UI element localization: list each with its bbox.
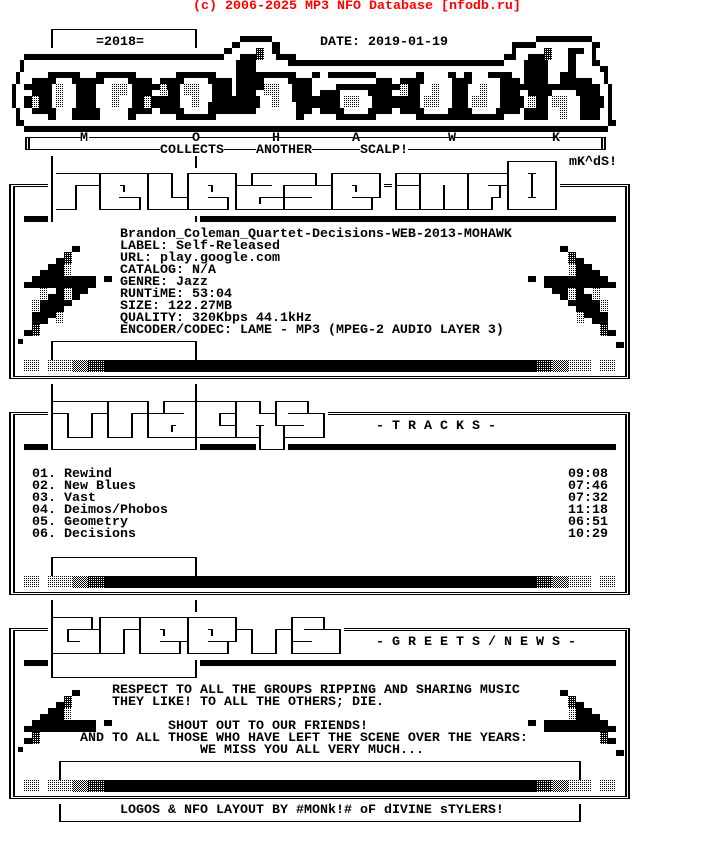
greets message: SHOUT OUT TO OUR FRIENDS! bbox=[168, 719, 368, 734]
greets lower tab bbox=[59, 761, 581, 780]
release metadata text: CATALOG: N/A bbox=[120, 263, 216, 278]
release metadata text bbox=[120, 227, 512, 338]
credits footer: LOGOS & NFO LAYOUT BY #MONk!# oF dIVINE sTYLERS! bbox=[120, 803, 504, 818]
release metadata text: QUALITY: 320Kbps 44.1kHz bbox=[120, 311, 312, 326]
release-info ascii logo bbox=[52, 156, 557, 222]
tracks gradient bar bbox=[24, 576, 615, 588]
MOHAWK letter strip bbox=[25, 131, 606, 158]
artist tag: mK^dS! bbox=[569, 155, 617, 170]
tracks frame bbox=[9, 412, 630, 595]
track list: 03. Vast bbox=[32, 491, 96, 506]
MOHAWK letter strip: K bbox=[552, 131, 560, 146]
tracks ascii logo bbox=[51, 384, 325, 450]
track durations bbox=[568, 467, 608, 542]
MOHAWK letter strip: O bbox=[192, 131, 200, 146]
panel: release info bbox=[9, 156, 630, 379]
right greets stray block bbox=[616, 750, 624, 756]
credits footer bbox=[59, 803, 581, 822]
year box: =2018= bbox=[96, 35, 144, 50]
greets message: WE MISS YOU ALL VERY MUCH... bbox=[200, 743, 424, 758]
track list bbox=[32, 467, 168, 542]
year box bbox=[51, 29, 197, 50]
track list: 04. Deimos/Phobos bbox=[32, 503, 168, 518]
MOHAWK letter strip: W bbox=[448, 131, 456, 146]
greets heading bars bbox=[24, 660, 616, 666]
release metadata text: SIZE: 122.27MB bbox=[120, 299, 232, 314]
greets message bbox=[80, 683, 528, 758]
release metadata text: URL: play.google.com bbox=[120, 251, 280, 266]
left greets stray block bbox=[18, 747, 23, 752]
MOHAWK letter strip: A bbox=[352, 131, 360, 146]
tracks heading bars bbox=[24, 444, 616, 450]
icon: right greets wing ornament bbox=[528, 690, 616, 744]
release gradient bar bbox=[24, 360, 615, 372]
MOHAWK letter strip: M bbox=[80, 131, 88, 146]
right stray block bbox=[616, 342, 624, 348]
release metadata text: LABEL: Self-Released bbox=[120, 239, 280, 254]
MOHAWK letter strip: SCALP! bbox=[360, 143, 408, 158]
MOHAWK letter strip: COLLECTS bbox=[160, 143, 224, 158]
panel: tracks bbox=[9, 384, 630, 595]
greets frame bbox=[9, 628, 630, 799]
tracks lower tab bbox=[51, 557, 197, 576]
track durations: 09:08 bbox=[568, 467, 608, 482]
track durations: 06:51 bbox=[568, 515, 608, 530]
tracks heading: - T R A C K S - bbox=[376, 419, 496, 434]
greets message: AND TO ALL THOSE WHO HAVE LEFT THE SCENE OVER THE YEARS: bbox=[80, 731, 528, 746]
greets heading: - G R E E T S / N E W S - bbox=[376, 635, 576, 650]
MOHAWK letter strip: ANOTHER bbox=[256, 143, 312, 158]
track list: 02. New Blues bbox=[32, 479, 136, 494]
track durations: 07:46 bbox=[568, 479, 608, 494]
track list: 06. Decisions bbox=[32, 527, 136, 542]
greets message: RESPECT TO ALL THE GROUPS RIPPING AND SHARING MUSIC bbox=[112, 683, 520, 698]
release heading bars bbox=[24, 216, 616, 222]
greets message: THEY LIKE! TO ALL THE OTHERS; DIE. bbox=[112, 695, 384, 710]
MOHAWK block logo bbox=[12, 36, 616, 132]
release lower tab bbox=[51, 341, 197, 360]
panel: greets bbox=[9, 600, 630, 799]
release frame bbox=[9, 184, 630, 379]
track list: 05. Geometry bbox=[32, 515, 128, 530]
track durations: 10:29 bbox=[568, 527, 608, 542]
release metadata text: Brandon_Coleman_Quartet-Decisions-WEB-2013-MOHAWK bbox=[120, 227, 512, 242]
greets ascii logo bbox=[51, 600, 341, 678]
left stray block bbox=[18, 339, 23, 344]
release metadata text: RUNTiME: 53:04 bbox=[120, 287, 232, 302]
track durations: 11:18 bbox=[568, 503, 608, 518]
MOHAWK letter strip: H bbox=[272, 131, 280, 146]
icon: left wing ornament bbox=[24, 246, 112, 336]
release metadata text: GENRE: Jazz bbox=[120, 275, 208, 290]
release metadata text: ENCODER/CODEC: LAME - MP3 (MPEG-2 AUDIO LAYER 3) bbox=[120, 323, 504, 338]
icon: left greets wing ornament bbox=[24, 690, 112, 744]
release date: DATE: 2019-01-19 bbox=[320, 35, 448, 50]
track durations: 07:32 bbox=[568, 491, 608, 506]
greets gradient bar bbox=[24, 780, 615, 792]
track list: 01. Rewind bbox=[32, 467, 112, 482]
icon: right wing ornament bbox=[528, 246, 616, 336]
